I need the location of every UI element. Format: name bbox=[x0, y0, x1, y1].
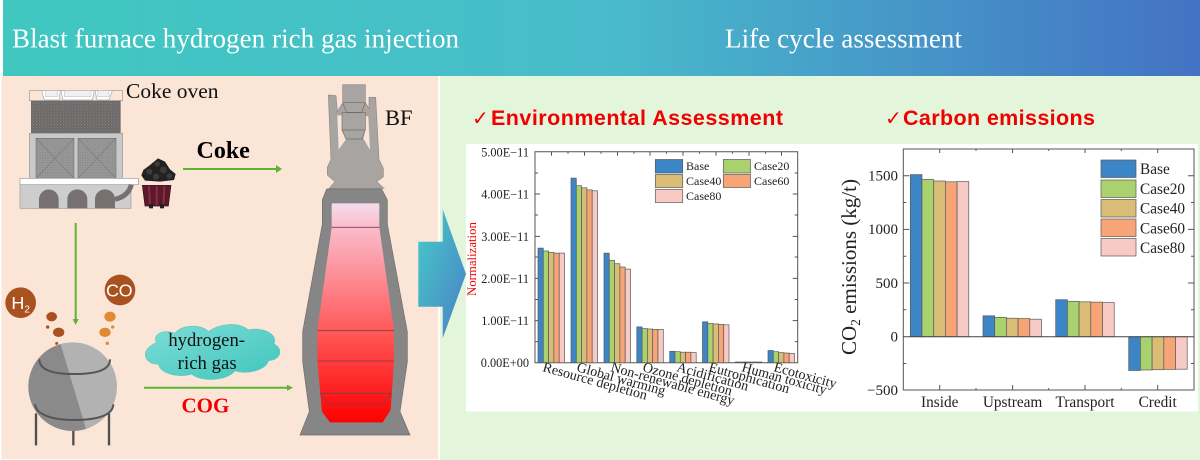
heading: environmental assessment: ✓ bbox=[472, 106, 489, 130]
arrow: coke to furnace bbox=[183, 165, 282, 173]
x axis labels: Human toxicity bbox=[740, 360, 828, 398]
legend bbox=[655, 159, 789, 203]
bars bbox=[910, 175, 1187, 370]
heading: blast furnace: Blast furnace hydrogen rich gas injection bbox=[12, 24, 460, 54]
legend: Case20 bbox=[1140, 181, 1185, 198]
bubble: CO: CO bbox=[106, 281, 133, 301]
cloud: hydrogen-rich gas bbox=[145, 325, 280, 379]
y axis labels: 1500 bbox=[868, 168, 898, 184]
heading: life cycle assessment: Life cycle assessment bbox=[725, 24, 962, 54]
label: coke oven: Coke oven bbox=[126, 79, 219, 103]
x axis labels: Eutrophication bbox=[707, 360, 791, 397]
label: BF: BF bbox=[385, 105, 413, 130]
bars bbox=[538, 178, 794, 363]
label: hydrogen-: hydrogen- bbox=[168, 330, 245, 351]
y axis labels: 500 bbox=[876, 276, 898, 292]
x axis labels: Transport bbox=[1056, 394, 1115, 411]
bubble: H2: 2 bbox=[24, 304, 30, 315]
label: coke: Coke bbox=[196, 138, 250, 164]
y axis labels: 3.00E−11 bbox=[481, 230, 529, 244]
y axis title: 2 bbox=[848, 319, 863, 326]
y axis labels: 5.00E−11 bbox=[481, 146, 529, 160]
label: COG: COG bbox=[182, 394, 229, 418]
y axis labels: −500 bbox=[867, 383, 898, 399]
x axis labels: Ecotoxicity bbox=[772, 360, 838, 392]
icon: coke oven bbox=[20, 91, 138, 208]
x axis labels: Ozone depletion bbox=[641, 360, 734, 399]
legend: Case60 bbox=[754, 174, 789, 188]
x axis labels: Upstream bbox=[983, 394, 1042, 411]
y axis title: CO bbox=[837, 326, 861, 355]
y axis title: emissions (kg/t) bbox=[837, 179, 861, 319]
arrow: COG to furnace bbox=[144, 385, 293, 391]
chart: carbon emissions bar chart bbox=[837, 149, 1194, 411]
legend: Case80 bbox=[686, 189, 721, 203]
y axis labels: 1.00E−11 bbox=[481, 314, 529, 328]
y axis labels bbox=[867, 168, 898, 399]
legend: Base bbox=[1140, 161, 1170, 178]
x axis labels bbox=[921, 394, 1178, 411]
furnace shell bbox=[300, 189, 410, 435]
y axis labels: 0.00E+00 bbox=[481, 356, 529, 370]
legend: Base bbox=[686, 159, 709, 173]
chart: normalization bar chart bbox=[465, 146, 838, 409]
y axis title: Normalization bbox=[465, 221, 479, 296]
x axis labels bbox=[541, 360, 838, 409]
y axis labels: 4.00E−11 bbox=[481, 188, 529, 202]
bubble: H2 bbox=[5, 287, 36, 318]
furnace head bbox=[327, 85, 384, 188]
y axis labels bbox=[481, 146, 529, 370]
furnace interior bbox=[317, 203, 394, 422]
y axis labels: 1000 bbox=[868, 222, 898, 238]
icon: coke cart bbox=[141, 158, 176, 208]
legend: Case80 bbox=[1140, 240, 1185, 257]
legend: Case40 bbox=[686, 174, 721, 188]
x axis labels: Non-renewable energy bbox=[609, 360, 736, 409]
x axis labels: Resource depletion bbox=[541, 360, 649, 404]
legend: Case20 bbox=[754, 159, 789, 173]
bubble: H2: H bbox=[11, 293, 24, 313]
icon: blast furnace bbox=[300, 85, 410, 435]
panel: blast furnace process bbox=[2, 76, 438, 459]
icon: gas holder with H2 and CO bbox=[5, 275, 135, 445]
x axis labels: Inside bbox=[921, 394, 959, 411]
header banner bbox=[3, 0, 1200, 76]
x axis labels: Global warming bbox=[575, 360, 667, 399]
bubble: CO bbox=[105, 275, 135, 305]
heading: environmental assessment: Environmental Assessment bbox=[491, 106, 783, 130]
legend: Case60 bbox=[1140, 220, 1185, 238]
y axis labels: 0 bbox=[890, 330, 898, 346]
legend: Case40 bbox=[1140, 200, 1185, 218]
arrow: process to assessment bbox=[418, 209, 466, 338]
y axis labels: 2.00E−11 bbox=[481, 272, 529, 286]
heading: carbon emissions: ✓ bbox=[885, 106, 902, 130]
label: rich gas: rich gas bbox=[178, 353, 237, 374]
x axis labels: Acidification bbox=[675, 360, 750, 395]
legend bbox=[1101, 160, 1185, 257]
heading: carbon emissions: Carbon emissions bbox=[903, 106, 1095, 130]
arrow: oven to gas holder bbox=[73, 223, 79, 325]
x axis labels: Credit bbox=[1139, 394, 1178, 411]
panel: life cycle assessment bbox=[440, 76, 1200, 460]
